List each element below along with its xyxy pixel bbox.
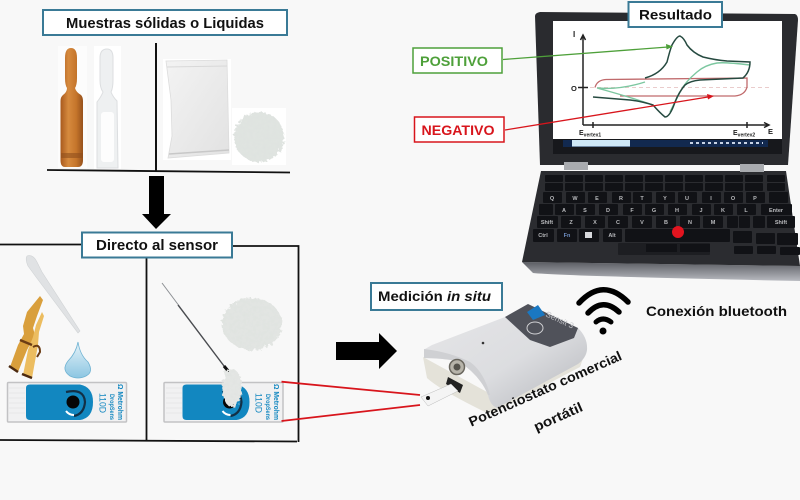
key labels: S [583, 208, 587, 214]
control panel: Sensit 3 [544, 310, 576, 331]
axis labels: O [571, 84, 577, 93]
key labels: M [711, 220, 716, 226]
key labels: N [688, 220, 692, 226]
key labels: T [640, 196, 644, 202]
connector port [450, 360, 464, 374]
key labels: L [744, 208, 748, 214]
icon: powder bag [163, 59, 231, 160]
icon: potentiostat device [421, 304, 587, 413]
screen [553, 21, 782, 139]
key labels: K [721, 208, 725, 214]
chart: cyclic voltammogram [571, 30, 773, 138]
positive curve: light green [597, 63, 750, 112]
laptop lid [535, 12, 798, 165]
sensor strip: left: DropSens [108, 394, 114, 421]
icon: wifi [579, 290, 628, 334]
sensor strip: right [164, 382, 283, 422]
key labels: Y [663, 196, 667, 202]
key labels: Q [550, 196, 555, 202]
icon: laptop [522, 12, 800, 281]
heading: result: Resultado [639, 6, 712, 22]
laptop base [522, 262, 800, 281]
axis labels: E [579, 130, 584, 137]
key labels: Z [569, 220, 573, 226]
axes [578, 35, 769, 128]
key labels: Fn [564, 233, 571, 239]
axis labels: vertex2 [738, 132, 755, 138]
panel frame [0, 244, 298, 442]
key labels: G [652, 208, 656, 214]
sensor strip: left [8, 382, 126, 422]
sensor strip: right: Ω Metrohm [272, 384, 279, 420]
icon: amber ampoule [58, 46, 87, 168]
keyboard [533, 175, 800, 255]
axis labels: E [768, 127, 773, 136]
label: positive [413, 48, 502, 73]
heading: direct to sensor: Directo al sensor [96, 238, 218, 254]
inserted strip [421, 384, 458, 406]
device front dome [424, 349, 490, 395]
heading: samples [43, 10, 287, 35]
axis labels: E [733, 130, 738, 137]
icon: pipette [26, 256, 80, 333]
shelf lines [47, 43, 290, 172]
key labels: R [619, 196, 623, 202]
axis labels: I [573, 30, 575, 39]
panel: direct to sensor [0, 232, 298, 442]
key labels: I [710, 196, 712, 202]
key labels [538, 196, 787, 239]
label: portable potentiostat: portátil [531, 399, 585, 434]
icon: clear ampoule [94, 46, 121, 169]
heading: direct to sensor [82, 232, 232, 258]
trackpoint [672, 226, 684, 238]
sensor strip: left: Ω Metrohm [116, 384, 123, 420]
heading: result [628, 2, 722, 27]
key labels: O [731, 196, 736, 202]
key labels: B [664, 220, 668, 226]
key labels: H [675, 208, 679, 214]
arrow: down [142, 176, 171, 229]
key labels: J [699, 208, 703, 214]
icon: drop [65, 342, 91, 378]
device lower body [423, 350, 586, 413]
sensor strip: right: DropSens [264, 394, 270, 421]
key labels: C [616, 220, 620, 226]
windows key [585, 232, 592, 238]
taskbar [553, 139, 782, 154]
icon: powder pile [222, 298, 282, 350]
key labels: D [606, 208, 610, 214]
key labels: F [630, 208, 634, 214]
key labels: Shift [775, 220, 787, 226]
key labels: Shift [541, 220, 553, 226]
key labels: Alt [608, 233, 616, 239]
powder on sensor [222, 369, 242, 407]
icon: spatula [162, 283, 229, 372]
label: portable potentiostat: Potenciostato comercial [466, 348, 624, 429]
label: in situ measurement: Medición in situ [378, 288, 491, 304]
key labels: Enter [769, 208, 784, 214]
heading: samples: Muestras sólidas o Liquidas [66, 16, 264, 32]
status light [482, 342, 484, 344]
sensor strip: left: 110D [98, 393, 108, 413]
key labels: A [562, 208, 566, 214]
sensor strip: right: 110D [254, 393, 264, 413]
zero line [590, 86, 772, 88]
label: negative [414, 117, 504, 142]
hinges [564, 162, 764, 172]
key labels: Ctrl [538, 233, 548, 239]
axis labels [571, 30, 773, 138]
key labels: E [595, 196, 599, 202]
icon: broken ampoules [9, 296, 44, 378]
panel: samples [43, 10, 290, 172]
positive curve: dark [593, 36, 750, 117]
negative curve [595, 78, 747, 96]
key labels: W [572, 196, 578, 202]
key labels: V [640, 220, 644, 226]
label: bluetooth connection: Conexión bluetooth [646, 304, 787, 319]
label: negative: NEGATIVO [422, 122, 495, 138]
label: positive: POSITIVO [420, 53, 488, 69]
key labels: P [753, 196, 757, 202]
key labels: U [685, 196, 689, 202]
arrow: negative [505, 94, 714, 130]
laptop deck [522, 171, 800, 266]
connector lines [282, 382, 420, 421]
icon: powder pile [232, 108, 286, 165]
arrow: positive [503, 44, 673, 60]
label: in situ measurement [371, 283, 502, 310]
arrow: right [336, 333, 397, 369]
key labels: X [593, 220, 597, 226]
axis labels: vertex1 [584, 132, 601, 138]
control panel [505, 304, 578, 347]
device top shell [424, 304, 587, 408]
